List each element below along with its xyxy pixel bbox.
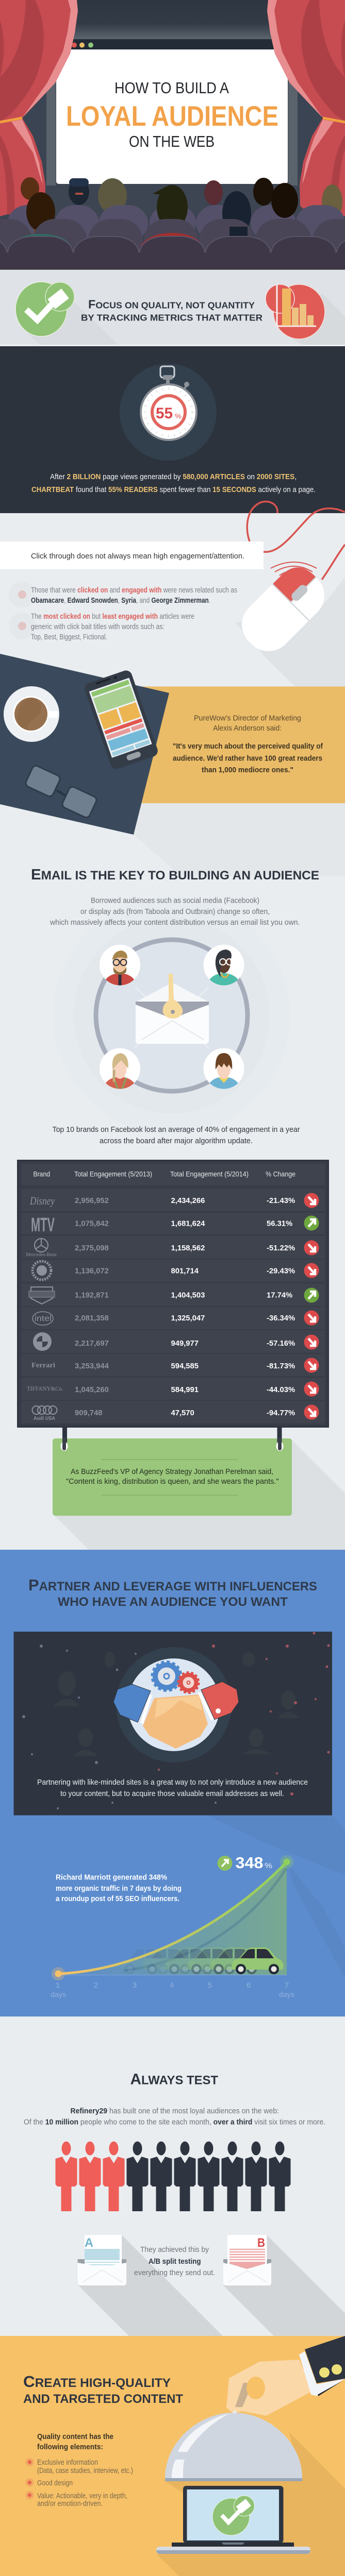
text: Richard Marriott: a roundup post of 55 SEO influencers. <box>56 1894 179 1903</box>
text: Richard Marriott: Richard Marriott generated 348% <box>56 1873 167 1882</box>
icon: glasses <box>24 765 98 819</box>
dark influencer panel <box>13 1632 345 1875</box>
table column percent change: -51.22% <box>267 1244 295 1252</box>
panel: click through and email background <box>0 513 345 1550</box>
icon: envelope A: A <box>85 2236 93 2250</box>
icon: laptop with check <box>156 2486 310 2554</box>
text block: borrowed audiences <box>50 896 300 927</box>
table header <box>21 1164 325 1185</box>
table column 2013 values: 2,956,952 <box>75 1197 109 1205</box>
icon: envelope and key <box>136 974 209 1044</box>
text block: quality elements: following elements: <box>37 2443 103 2451</box>
icon: coffee cup <box>4 686 59 742</box>
icon: green check <box>15 282 74 336</box>
brand logos: Mercedes-Benz <box>26 1252 57 1257</box>
icon: envelope B <box>223 2235 271 2285</box>
callout: BuzzFeed hanging sign: As BuzzFeed's VP of Agency Strategy Jonathan Perelman said, <box>71 1468 273 1476</box>
avatar: man with glasses <box>100 945 140 986</box>
panel: always test <box>0 2016 345 2336</box>
table column 2013 values: 1,192,871 <box>75 1291 109 1299</box>
icon: handshake with gears <box>113 1647 239 1762</box>
table column percent change: 17.74% <box>267 1291 292 1299</box>
text block: click findings: generic with click bait titles with words such as: <box>31 623 165 631</box>
text block: click findings: Obamacare, Edward Snowden, Syria, and George Zimmerman. <box>31 597 210 605</box>
heading: CREATE HIGH-QUALITY <box>23 2372 171 2391</box>
callout: BuzzFeed hanging sign: "Content is king, distribution is queen, and she wears the pants." <box>66 1478 278 1486</box>
axis labels: 6 <box>247 1981 251 1990</box>
heading: PARTNER AND LEVERAGE WITH INFLUENCERS <box>28 1576 317 1594</box>
title: HOW TO BUILD A <box>114 79 229 97</box>
audience and seats <box>0 177 345 269</box>
long shadows <box>25 2432 345 2576</box>
axis labels <box>51 1981 294 1998</box>
brand logos: TIFFANY&Co. <box>27 1385 63 1392</box>
brand logos: MTV <box>31 1214 55 1236</box>
panel: PureWow quote: than 1,000 mediocre ones." <box>202 766 293 774</box>
table column 2013 values: 2,375,098 <box>75 1244 109 1252</box>
icon: smartphone <box>83 669 159 771</box>
panel: high-quality content <box>0 2336 345 2576</box>
table column 2014 values: 594,585 <box>171 1362 199 1370</box>
panel: theatre hero <box>0 0 345 269</box>
text block: click findings: Those that were clicked on and engaged with were news related such as <box>31 586 237 595</box>
heading: WHO HAVE AN AUDIENCE YOU WANT <box>58 1595 288 1609</box>
table column percent change: 56.31% <box>267 1220 292 1228</box>
stat: 348 percent: 348 <box>235 1854 263 1872</box>
avatar: woman with white glasses <box>203 945 244 986</box>
title: LOYAL AUDIENCE <box>66 100 278 132</box>
icon: envelope B: B <box>257 2236 265 2250</box>
table column percent change: -81.73% <box>267 1362 295 1370</box>
table column 2013 values: 1,075,842 <box>75 1220 109 1228</box>
table header: Brand <box>33 1170 50 1178</box>
brand logos: Disney <box>29 1194 55 1207</box>
icon: envelope A <box>77 2235 126 2285</box>
text block: top 10 brands: Top 10 brands on Facebook lost an average of 40% of engagement in a year <box>53 1125 300 1134</box>
panel: PureWow quote: "It's very much about the perceived quality of <box>173 742 323 751</box>
table column percent change: -44.03% <box>267 1386 295 1394</box>
table column percent change: -94.77% <box>267 1409 295 1417</box>
panel text: to your content, but to acquire those valuable email addresses as well. <box>60 1789 284 1798</box>
text block: Refinery29: Refinery29 has built one of the most loyal audiences on the web: <box>70 2107 279 2115</box>
table column percent change: -21.43% <box>267 1197 295 1205</box>
network dots and faint avatars <box>22 1632 330 1809</box>
axis labels: 7 <box>285 1981 289 1990</box>
axis labels: 2 <box>94 1981 98 1990</box>
text block: borrowed audiences: Borrowed audiences such as social media (Facebook) <box>91 896 259 905</box>
stat: 348 percent <box>218 1854 272 1872</box>
right curtain <box>267 0 345 216</box>
table: brand engagement <box>17 1160 329 1428</box>
icon: stopwatch 55%: % <box>175 412 182 420</box>
panel: PureWow quote <box>0 686 345 876</box>
browser toolbar <box>52 39 294 49</box>
text block: quality elements: (Data, case studies, interview, etc.) <box>37 2466 133 2475</box>
panel: PureWow quote: PureWow's Director of Marketing <box>194 714 301 722</box>
panel: PureWow quote: Alexis Anderson said: <box>213 724 282 733</box>
text block: quality elements: Exclusive information <box>37 2458 98 2467</box>
table header: Total Engagement (5/2014) <box>170 1170 249 1178</box>
panel: chartbeat stat <box>0 345 345 513</box>
axis labels: days <box>279 1990 294 1998</box>
icon: stopwatch 55% <box>120 364 217 461</box>
table column 2014 values: 801,714 <box>171 1267 199 1276</box>
heading: ALWAYS TEST <box>130 2071 218 2088</box>
text block: quality elements: Quality content has the <box>37 2432 113 2441</box>
stat text: After 2 BILLION page views generated by 580,000 ARTICLES on 2000 SITES, <box>50 472 297 481</box>
cloche <box>165 2413 302 2478</box>
title: ON THE WEB <box>129 132 215 150</box>
table column 2014 values: 949,977 <box>171 1340 199 1348</box>
heading: email is the key: EMAIL IS THE KEY TO BUILDING AN AUDIENCE <box>31 867 319 883</box>
heading: AND TARGETED CONTENT <box>23 2392 183 2406</box>
axis labels: 5 <box>208 1981 212 1990</box>
icon: red bar chart <box>266 284 325 339</box>
table column 2013 values: 1,045,260 <box>75 1386 109 1394</box>
table column 2013 values <box>75 1197 109 1417</box>
text: Richard Marriott <box>56 1873 182 1903</box>
avatar: brown haired person <box>203 1048 244 1089</box>
pictogram: three in ten visitors <box>56 2141 291 2211</box>
table header: Total Engagement (5/2013) <box>74 1170 152 1178</box>
text: A/B split testing: everything they send out. <box>134 2268 215 2277</box>
panel: focus on quality heading band <box>0 269 345 346</box>
callout: click through: Click through does not always mean high engagement/attention. <box>31 552 244 561</box>
panel text: Partnering with like-minded sites is a great way to not only introduce a new audience <box>37 1778 308 1787</box>
icon: stopwatch 55%: 55 <box>156 405 173 422</box>
brand logos <box>26 1194 63 1421</box>
table column 2013 values: 2,217,697 <box>75 1340 109 1348</box>
heading: FOCUS ON QUALITY, NOT QUANTITY <box>88 298 255 311</box>
stat: 348 percent: % <box>265 1861 272 1870</box>
text block: borrowed audiences: which massively affects your content distribution versus an email list you own. <box>50 918 300 927</box>
text block: Refinery29: Of the 10 million people who come to the site each month, over a third visit six times or more. <box>24 2117 325 2127</box>
panel: partner with influencers <box>0 1550 345 2016</box>
text block: click findings: The most clicked on but least engaged with articles were <box>31 613 194 621</box>
long shadows <box>77 2235 345 2336</box>
table column 2014 values: 47,570 <box>171 1409 194 1417</box>
text: A/B split testing: A/B split testing <box>149 2257 201 2266</box>
text: A/B split testing <box>134 2245 215 2277</box>
text block: quality elements: and/or emotion-driven. <box>37 2499 103 2508</box>
table column 2013 values: 909,748 <box>75 1409 102 1417</box>
left curtain <box>0 0 78 216</box>
heading <box>28 1576 317 1609</box>
table column 2013 values: 3,253,944 <box>75 1362 109 1370</box>
illustration: desk with coffee, phone and glasses <box>0 654 169 835</box>
axis labels: 4 <box>170 1981 174 1990</box>
table column percent change: -29.43% <box>267 1267 295 1276</box>
table column 2014 values: 584,991 <box>171 1386 199 1394</box>
table column percent change <box>267 1197 295 1417</box>
table column 2014 values: 1,404,503 <box>171 1291 205 1299</box>
table column 2013 values: 1,136,072 <box>75 1267 109 1276</box>
diagram: audience ring with key envelope <box>94 938 250 1093</box>
table column 2014 values: 1,681,624 <box>171 1220 205 1228</box>
text block: click findings <box>9 581 237 641</box>
avatar: blonde woman <box>100 1048 140 1089</box>
title <box>66 79 278 150</box>
axis labels: 3 <box>133 1981 137 1990</box>
chart: organic traffic growth <box>51 1854 345 1998</box>
text: A/B split testing: They achieved this by <box>140 2245 209 2254</box>
table column 2014 values: 2,434,266 <box>171 1197 205 1205</box>
brand logos: Audi USA <box>34 1416 55 1421</box>
text block: top 10 brands: across the board after major algorithm update. <box>100 1137 253 1145</box>
table column 2014 values: 1,158,562 <box>171 1244 205 1252</box>
illustration: waiter hand lifting cloche <box>165 2336 345 2481</box>
text block: click findings: Top, Best, Biggest, Fictional. <box>31 633 107 641</box>
cinema screen <box>56 49 288 184</box>
table column percent change: -57.16% <box>267 1340 295 1348</box>
panel text <box>37 1778 308 1798</box>
icon: computer mouse with cable <box>232 502 345 742</box>
table column 2014 values <box>171 1197 205 1417</box>
stat text: CHARTBEAT found that 55% READERS spent fewer than 15 SECONDS actively on a page. <box>31 485 316 494</box>
callout: click through <box>0 541 264 569</box>
text block: quality elements <box>26 2432 133 2508</box>
heading: BY TRACKING METRICS THAT MATTER <box>81 312 262 323</box>
brand logos: intel <box>35 1314 52 1323</box>
table column percent change: -36.34% <box>267 1314 295 1323</box>
table column 2013 values: 2,081,358 <box>75 1314 109 1323</box>
text: Richard Marriott: more organic traffic in 7 days by doing <box>56 1884 182 1893</box>
car trail <box>121 1947 261 1974</box>
table row backgrounds <box>21 1189 325 1423</box>
brand logos: Ferrari <box>31 1362 55 1369</box>
panel: PureWow quote: audience. We'd rather have 100 great readers <box>173 754 322 762</box>
heading <box>23 2372 183 2406</box>
axis labels: 1 <box>56 1981 60 1990</box>
text block: Refinery29 <box>24 2107 325 2127</box>
icon: green car <box>232 1947 284 1974</box>
change arrows <box>304 1193 319 1420</box>
text block: borrowed audiences: or display ads (from Taboola and Outbrain) change so often, <box>80 907 270 916</box>
text block: quality elements: Good design <box>37 2479 73 2487</box>
text block: quality elements: Value: Actionable, very in depth, <box>37 2492 127 2500</box>
heading <box>81 298 262 323</box>
axis labels: days <box>51 1990 66 1998</box>
callout: BuzzFeed hanging sign <box>53 1428 345 1550</box>
table header: % Change <box>266 1170 295 1178</box>
stat text <box>31 472 316 494</box>
text block: top 10 brands <box>53 1125 300 1145</box>
table column 2014 values: 1,325,047 <box>171 1314 205 1323</box>
